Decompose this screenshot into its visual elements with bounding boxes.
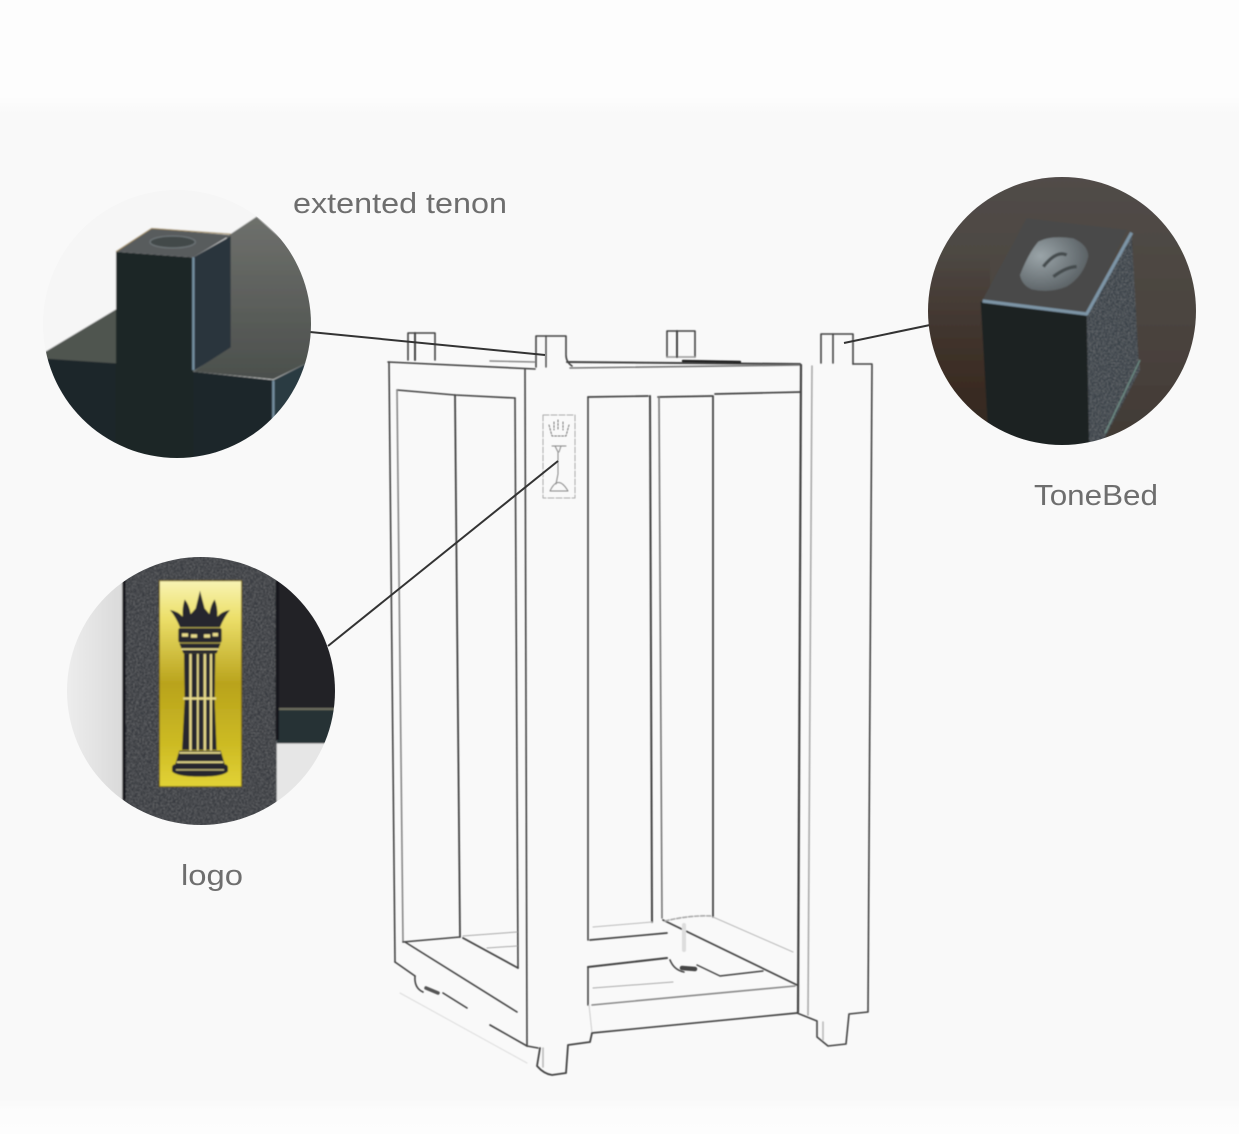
right top plane bbox=[193, 217, 317, 379]
front centre post and foot bbox=[525, 369, 592, 1075]
right post and foot bbox=[797, 365, 872, 1046]
detail circle: logo bbox=[67, 557, 335, 825]
tenon: right bbox=[821, 334, 853, 364]
post top face bbox=[984, 268, 1102, 310]
detail circle: ToneBed bbox=[928, 177, 1196, 445]
small logo plate sketch bbox=[543, 415, 575, 498]
back centre foot bbox=[670, 960, 695, 972]
post side face bbox=[1087, 233, 1140, 453]
lower front beam bbox=[40, 358, 273, 463]
emblem highlights bbox=[176, 633, 224, 770]
rook emblem bbox=[170, 591, 230, 777]
bottom frame bbox=[588, 916, 797, 1033]
post front face bbox=[114, 250, 194, 373]
tenon: front centre bbox=[536, 336, 572, 367]
connector: logo bbox=[328, 461, 558, 646]
wireframe rack drawing bbox=[388, 331, 872, 1075]
back window frame bbox=[588, 365, 812, 1015]
label: ToneBed: ToneBed bbox=[1034, 480, 1158, 512]
connector: ToneBed bbox=[844, 325, 930, 343]
gold plate bbox=[159, 581, 242, 787]
edge highlights bbox=[193, 257, 273, 427]
left rear foot bbox=[415, 976, 438, 993]
detail circle: extented tenon bbox=[46, 216, 311, 458]
lower side beam bbox=[272, 362, 306, 417]
post top face bbox=[116, 228, 231, 257]
post side face bbox=[193, 236, 231, 371]
top stamp bbox=[150, 236, 195, 248]
left top plane bbox=[40, 309, 116, 365]
edge highlights bbox=[983, 233, 1132, 314]
tenon: far left bbox=[408, 333, 435, 360]
dark rear post bbox=[278, 582, 335, 709]
post front face bbox=[981, 302, 1089, 453]
left side panel bbox=[389, 362, 527, 1063]
label: extented tenon: extented tenon bbox=[293, 188, 507, 220]
tenon: back bbox=[667, 331, 695, 357]
rear rail band bbox=[276, 709, 334, 744]
main post bbox=[123, 540, 277, 840]
top rails bbox=[388, 361, 872, 369]
connector: extented tenon bbox=[310, 332, 545, 355]
label: logo: logo bbox=[181, 860, 243, 892]
stamped mark bbox=[1020, 237, 1088, 291]
